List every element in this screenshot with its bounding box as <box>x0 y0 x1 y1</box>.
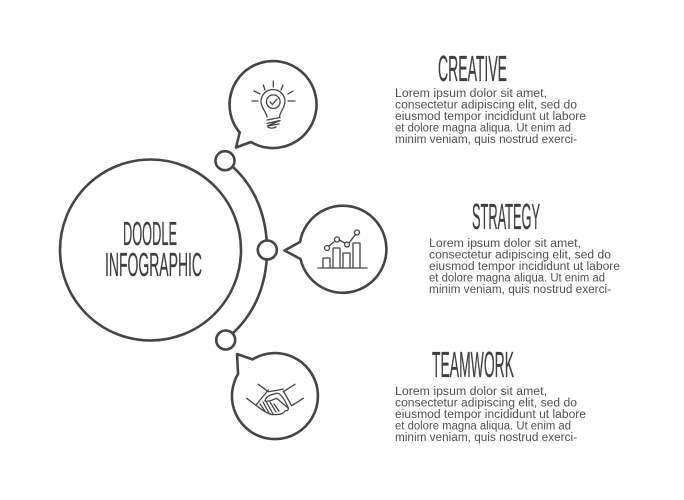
text block: creative: et dolore magna aliqua. Ut enim ad <box>395 122 571 134</box>
text block: strategy: Lorem ipsum dolor sit amet, <box>429 238 581 250</box>
main circle: INFOGRAPHIC <box>105 246 202 283</box>
icon: handshake <box>247 384 303 415</box>
text: STRATEGY <box>472 196 540 237</box>
text block: creative: consectetur adipiscing elit, sed do <box>395 100 577 112</box>
icon: light bulb <box>252 81 295 128</box>
speech bubble: strategy <box>284 206 386 293</box>
icon: bar chart <box>318 230 367 268</box>
text: CREATIVE <box>438 48 507 89</box>
text block: teamwork: eiusmod tempor incididunt ut labore <box>395 409 586 421</box>
node: top <box>216 151 234 170</box>
speech bubble: teamwork <box>232 353 318 439</box>
center title: DOODLE <box>123 215 177 252</box>
text block: teamwork: et dolore magna aliqua. Ut enim ad <box>395 420 571 432</box>
center title <box>105 215 202 283</box>
text block: strategy <box>429 238 620 296</box>
text block: teamwork: Lorem ipsum dolor sit amet, <box>395 386 547 398</box>
text block: creative <box>395 88 586 146</box>
text: TEAMWORK <box>432 344 514 385</box>
speech bubble: creative <box>230 61 317 148</box>
text block: teamwork <box>395 386 586 444</box>
text block: creative: Lorem ipsum dolor sit amet, <box>395 88 547 100</box>
connecting arc <box>233 167 267 333</box>
text block: creative: eiusmod tempor incididunt ut labore <box>395 111 586 123</box>
text block: teamwork: minim veniam, quis nostrud exerci- <box>395 432 577 444</box>
node: bottom <box>216 330 235 350</box>
text block: creative: minim veniam, quis nostrud exerci- <box>395 134 577 146</box>
text block: strategy: consectetur adipiscing elit, sed do <box>429 250 611 262</box>
text block: strategy: et dolore magna aliqua. Ut enim ad <box>429 272 605 284</box>
node: middle <box>258 240 277 260</box>
main circle <box>60 160 241 340</box>
text block: teamwork: consectetur adipiscing elit, sed do <box>395 398 577 410</box>
text block: strategy: eiusmod tempor incididunt ut labore <box>429 261 620 273</box>
text block: strategy: minim veniam, quis nostrud exerci- <box>429 284 611 296</box>
